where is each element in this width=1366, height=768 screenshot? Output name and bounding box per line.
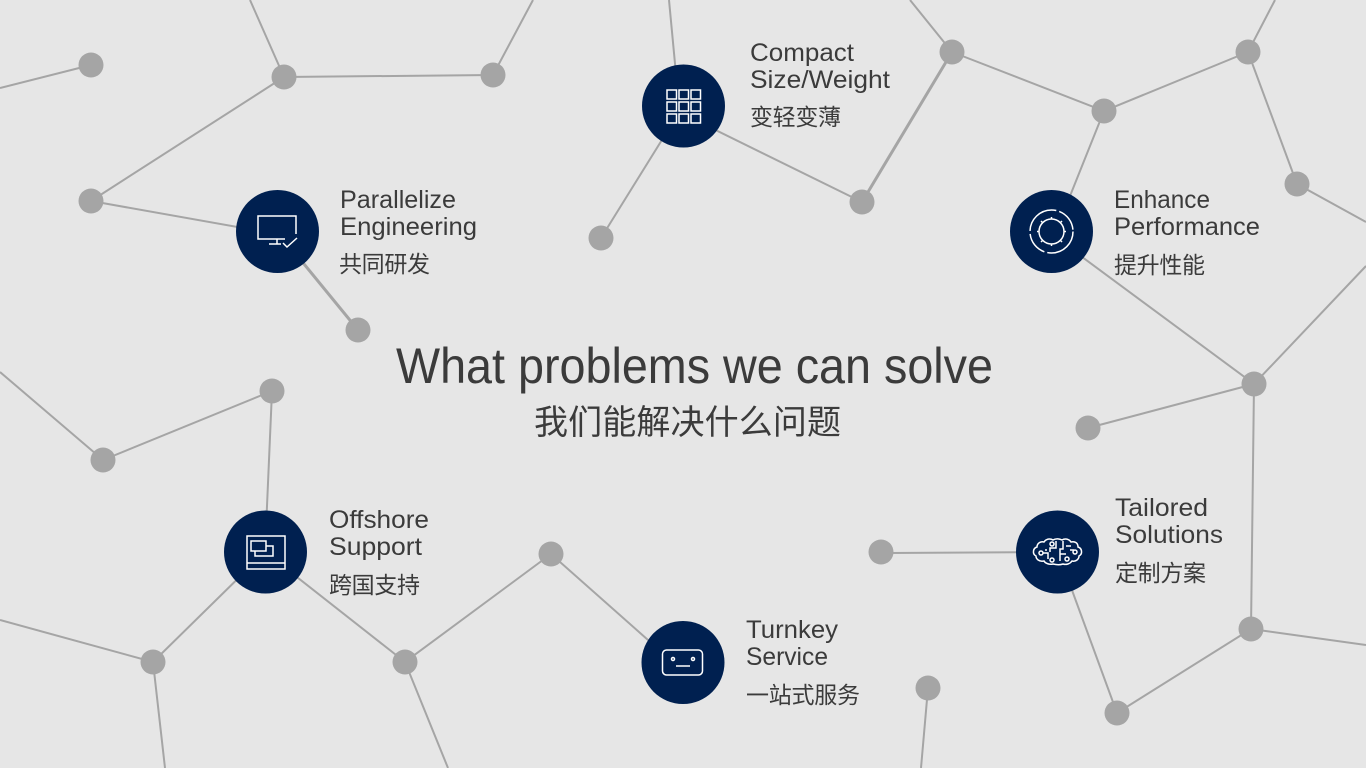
icon: gear ring <box>1010 190 1093 273</box>
label: Tailored Solutions: 定制方案 <box>1115 554 1206 588</box>
label: Compact Size/Weight: Compact <box>750 39 854 67</box>
item: Turnkey Service <box>642 616 860 710</box>
label: Parallelize Engineering: 共同研发 <box>339 245 430 279</box>
label: Enhance Performance: Enhance <box>1114 186 1210 214</box>
label: Compact Size/Weight: 变轻变薄 <box>750 98 841 132</box>
label: Offshore Support: Offshore <box>329 506 429 534</box>
label: Tailored Solutions: Tailored <box>1115 494 1208 522</box>
label: Parallelize Engineering <box>339 186 477 279</box>
icon: circuit brain <box>1016 510 1099 594</box>
label: Offshore Support <box>329 506 429 600</box>
label: Compact Size/Weight: Size/Weight <box>750 66 890 94</box>
label: Enhance Performance <box>1114 186 1260 280</box>
label: Enhance Performance: 提升性能 <box>1114 246 1205 280</box>
label: Tailored Solutions: Solutions <box>1115 521 1223 549</box>
label: Turnkey Service: Service <box>746 643 828 671</box>
item: Compact Size/Weight <box>642 39 890 148</box>
label: Turnkey Service: 一站式服务 <box>746 676 860 710</box>
title: 我们能解决什么问题 <box>534 395 841 444</box>
item: Offshore Support <box>224 506 429 600</box>
label: Compact Size/Weight <box>750 39 890 132</box>
item: Tailored Solutions <box>1016 494 1223 594</box>
label: Offshore Support: Support <box>329 533 422 561</box>
label: Offshore Support: 跨国支持 <box>329 566 420 600</box>
label: Enhance Performance: Performance <box>1114 213 1260 241</box>
icon: overlapping windows <box>224 510 307 594</box>
label: Tailored Solutions <box>1115 494 1223 588</box>
icon: robot face <box>642 621 724 704</box>
title: What problems we can solve <box>396 338 993 394</box>
label: Parallelize Engineering: Engineering <box>340 213 477 241</box>
label: Turnkey Service <box>746 616 860 710</box>
label: Parallelize Engineering: Parallelize <box>340 186 456 214</box>
icon: grid of squares <box>642 64 725 148</box>
item: Enhance Performance <box>1010 186 1260 280</box>
label: Turnkey Service: Turnkey <box>746 616 839 644</box>
item: Parallelize Engineering <box>236 186 477 279</box>
icon: monitor with check <box>236 190 319 273</box>
title <box>396 338 993 444</box>
